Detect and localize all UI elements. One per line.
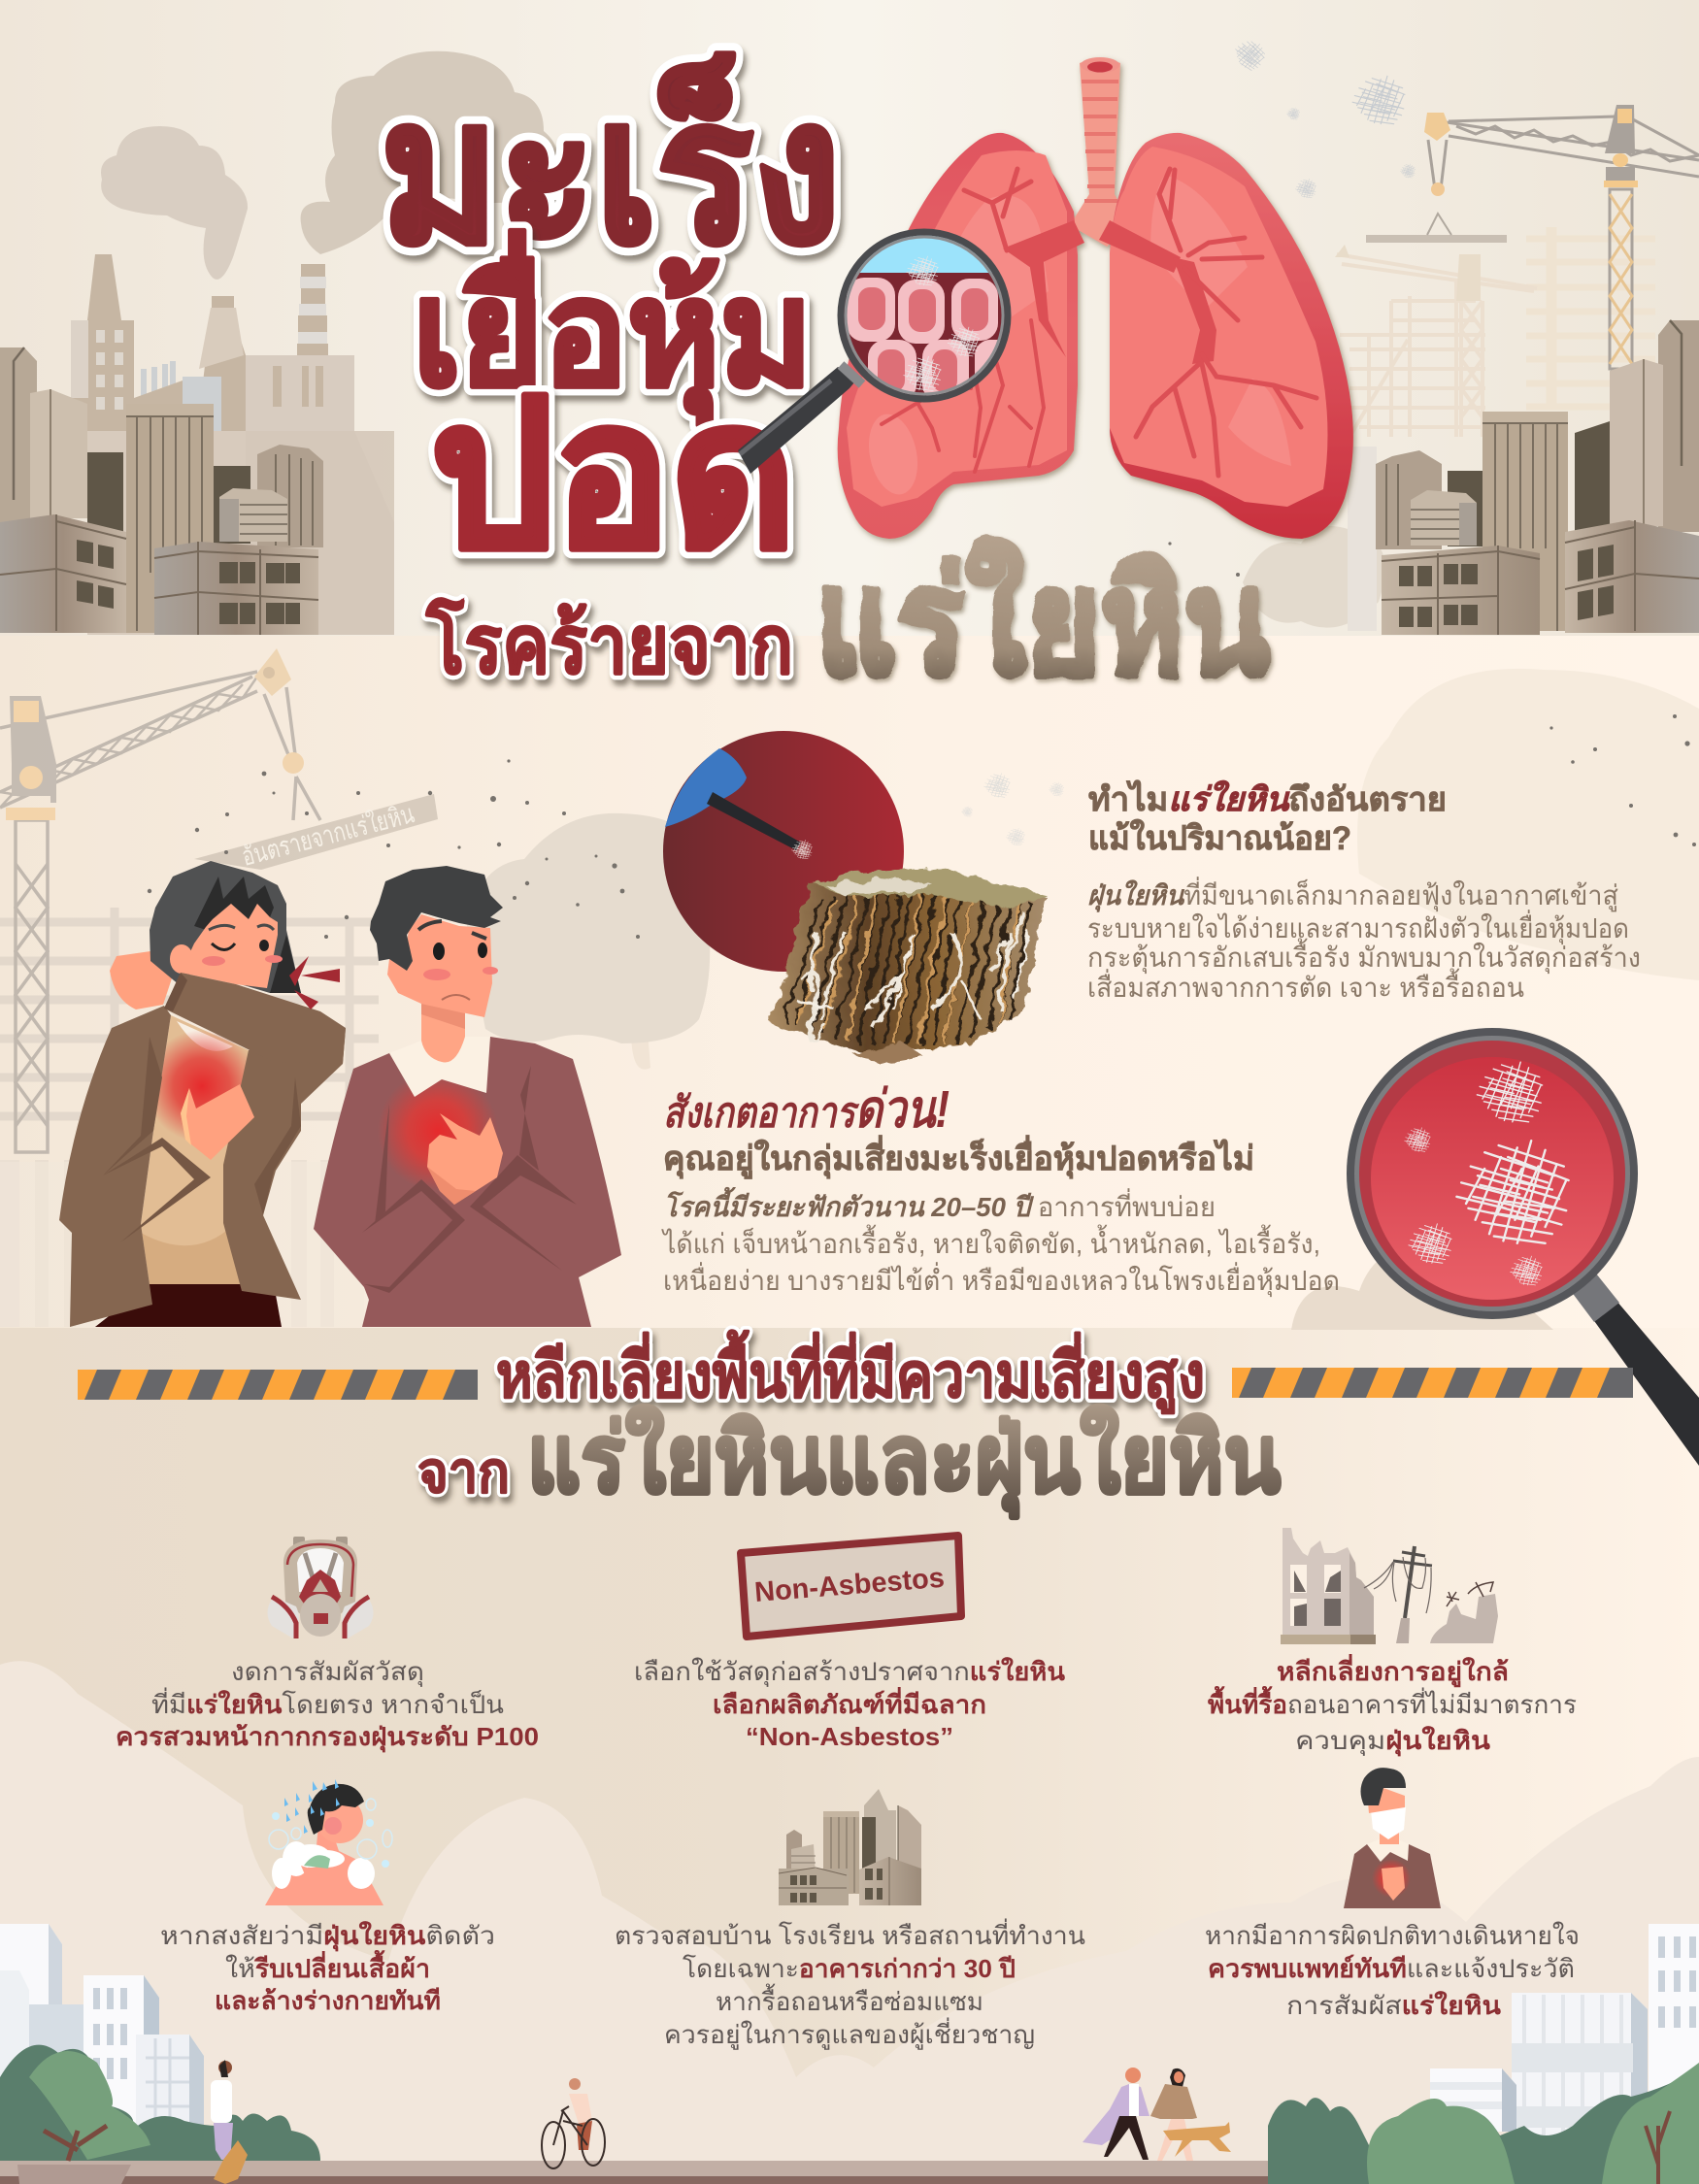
text block: card 4 change clothes <box>160 1921 495 2015</box>
text block: dust description: ระบบหายใจได้ง่ายและสามารถฝังตัวในเยื่อหุ้มปอด <box>1087 910 1629 945</box>
text block: card 1 no direct contact: ควรสวมหน้ากากกรองฝุ่นระดับ P100 <box>116 1722 539 1753</box>
left factory and city skyline <box>0 254 394 635</box>
bronchi branches <box>882 169 1316 476</box>
text block: card 1 no direct contact <box>116 1657 539 1753</box>
icon: large magnifier with fibers <box>1347 1028 1699 1466</box>
text block: card 2 choose materials: เลือกใช้วัสดุก่อสร้างปราศจาก แร่ใยหิน <box>634 1657 1065 1687</box>
text block: card 4 change clothes: หากสงสัยว่ามี ฝุ่นใยหิน ติดตัว <box>160 1921 495 1952</box>
text block: card 3 avoid demolition: หลีกเลี่ยงการอยู่ใกล้ <box>1277 1653 1509 1688</box>
text block: dust description: ฝุ่นใยหินที่มีขนาดเล็กมากลอยฟุ้งในอากาศเข้าสู่ <box>1087 877 1618 912</box>
background: middle band clouds <box>604 669 1699 1330</box>
sleeve covering mouth <box>164 973 346 1064</box>
icon: person showering <box>265 1779 392 1905</box>
heading: จาก: จาก <box>417 1441 510 1505</box>
text block: dust description: กระตุ้นการอักเสบเรื้อรัง มักพบมากในวัสดุก่อสร้าง <box>1087 938 1641 975</box>
heading: asbestos and asbestos dust: แร่ใยหินและฝุ่นใยหิน <box>527 1406 1281 1519</box>
text block: dust description <box>1087 877 1641 1003</box>
cough marks <box>289 956 340 1009</box>
heading line 2: แม้ในปริมาณน้อย? <box>1088 818 1351 857</box>
heading: จาก: จาก <box>417 1441 510 1505</box>
raised fist <box>110 951 173 1009</box>
hands on chest <box>427 1113 503 1205</box>
dust particles <box>148 462 1696 939</box>
title: มะเร็ง: มะเร็ง <box>381 53 841 283</box>
text block: dust description: เสื่อมสภาพจากการตัด เจาะ หรือรื้อถอน <box>1087 968 1524 1003</box>
heading: risk group: คุณอยู่ในกลุ่มเสี่ยงมะเร็งเยื่อหุ้มปอดหรือไม่ <box>663 1135 1254 1179</box>
sidewalk <box>0 2161 1291 2176</box>
right crane and scaffolds <box>1243 105 1699 628</box>
right lung <box>1110 133 1353 539</box>
hazard stripe: left <box>78 1370 478 1400</box>
figure: cyclist <box>542 2078 605 2168</box>
text block: card 1 no direct contact: ที่มีแร่ใยหินโดยตรง หากจำเป็น <box>151 1687 504 1719</box>
text block: card 6 see doctor <box>1205 1921 1580 2020</box>
right side cloud behind lungs <box>1243 526 1385 628</box>
icon: respirator mask <box>267 1537 374 1638</box>
icon: Non-Asbestos label: Non-Asbestos <box>753 1563 946 1608</box>
heading: watch for urgent symptoms: สังเกตอาการด่วน! <box>663 1080 949 1139</box>
trees: right <box>1268 2063 1699 2184</box>
floating fibers near rock <box>961 774 1064 845</box>
bottom city: right buildings <box>1430 1924 1699 2145</box>
text block: card 2 choose materials: “Non-Asbestos” <box>746 1722 953 1751</box>
title: มะเร็ง: มะเร็ง <box>381 53 841 283</box>
trees: left <box>0 2045 320 2184</box>
subtitle: แร่ใยหิน: แร่ใยหิน <box>816 539 1270 706</box>
title: ปอด: ปอด <box>431 361 796 589</box>
illustration: man holding chest <box>314 866 621 1327</box>
warning sign text on hanging beam: อันตรายจากแร่ใยหิน <box>239 798 417 872</box>
background: top band <box>0 0 1699 637</box>
text block: card 6 see doctor: ควรพบแพทย์ทันที และแจ้งประวัติ <box>1208 1954 1575 1983</box>
text block: symptoms: เหนื่อยง่าย บางรายมีไข้ต่ำ หรือมีของเหลวในโพรงเยื่อหุ้มปอด <box>663 1262 1340 1298</box>
right city skyline <box>1348 320 1699 635</box>
title: เยื่อหุ้ม: เยื่อหุ้ม <box>413 230 813 426</box>
text block: card 1 no direct contact: งดการสัมผัสวัสดุ <box>231 1657 424 1687</box>
trachea <box>1070 57 1131 247</box>
background: pale clouds in lower band <box>0 1661 1699 2184</box>
text block: card 5 check buildings: ตรวจสอบบ้าน โรงเรียน หรือสถานที่ทำงาน <box>615 1918 1085 1950</box>
heading: avoid high-risk areas: หลีกเลี่ยงพื้นที่ที่มีความเสี่ยงสูง <box>496 1330 1205 1414</box>
illustration: woman coughing <box>59 861 346 1327</box>
hand on chest <box>181 1084 254 1160</box>
bronchi tree <box>1003 220 1216 364</box>
subtitle: โรคร้ายจาก: โรคร้ายจาก <box>425 598 793 690</box>
head <box>150 861 301 993</box>
left lung <box>838 133 1078 539</box>
sidewalk curb <box>0 2176 1291 2184</box>
heading: avoid high-risk areas: หลีกเลี่ยงพื้นที่ที่มีความเสี่ยงสูง <box>496 1330 1205 1414</box>
text block: card 3 avoid demolition: ควบคุม ฝุ่นใยหิน <box>1295 1726 1490 1757</box>
icon: Non-Asbestos label <box>741 1536 961 1637</box>
text block: card 3 avoid demolition: พื้นที่รื้อถอนอาคารที่ไม่มีมาตรการ <box>1208 1685 1577 1719</box>
text block: symptoms: โรคนี้มีระยะฟักตัวนาน 20–50 ปี อาการที่พบบ่อย <box>663 1186 1216 1222</box>
text block: symptoms <box>661 1186 1340 1298</box>
icon: magnifier over lung <box>738 223 1019 474</box>
text block: card 3 avoid demolition <box>1208 1653 1577 1757</box>
title: ปอด: ปอด <box>431 361 796 589</box>
left crane and scaffold (faded background) <box>0 648 438 1327</box>
background: lower band <box>0 1328 1699 2184</box>
smoke clouds left <box>101 51 558 280</box>
subtitle: โรคร้ายจาก: โรคร้ายจาก <box>425 598 793 690</box>
text block: card 5 check buildings: หากรื้อถอนหรือซ่อมแซม <box>716 1983 983 2016</box>
hazard stripe: right <box>1232 1368 1633 1398</box>
icon: demolished building <box>1281 1528 1498 1644</box>
illustration: asbestos rock <box>771 867 1047 1062</box>
illustration: lungs <box>838 57 1353 539</box>
text block: card 2 choose materials: เลือกผลิตภัณฑ์ที่มีฉลาก <box>713 1686 986 1719</box>
illustration: red disc and tweezers <box>663 731 904 972</box>
title: เยื่อหุ้ม: เยื่อหุ้ม <box>413 230 813 426</box>
background smoke behind people <box>466 813 715 1043</box>
text block: card 5 check buildings: ควรอยู่ในการดูแลของผู้เชี่ยวชาญ <box>664 2017 1035 2050</box>
figure: couple walking dog <box>1083 2068 1231 2161</box>
text block: card 6 see doctor: หากมีอาการผิดปกติทางเดินหายใจ <box>1205 1921 1580 1950</box>
heading: why asbestos is dangerous: ทำไมแร่ใยหินถึงอันตราย <box>1088 779 1447 818</box>
text block: card 5 check buildings: โดยเฉพาะอาคารเก่ากว่า 30 ปี <box>683 1954 1016 1983</box>
text block: card 2 choose materials <box>634 1657 1065 1751</box>
bottom city: left buildings <box>0 1924 204 2150</box>
figure: woman walking dog <box>211 2060 248 2184</box>
text block: card 6 see doctor: การสัมผัส แร่ใยหิน <box>1286 1991 1501 2020</box>
background: middle band <box>0 636 1699 1330</box>
icon: buildings <box>779 1789 921 1905</box>
icon: man with face mask <box>1344 1768 1441 1908</box>
text block: card 4 change clothes: ให้รีบเปลี่ยนเสื้อผ้า <box>225 1949 430 1983</box>
text block: card 4 change clothes: และล้างร่างกายทันที <box>215 1986 441 2015</box>
text block: symptoms: ได้แก่ เจ็บหน้าอกเรื้อรัง, หายใจติดขัด, น้ำหนักลด, ไอเรื้อรัง, <box>661 1224 1320 1259</box>
text block: card 5 check buildings <box>615 1918 1085 2050</box>
floating asbestos fibers at top <box>1230 36 1416 198</box>
